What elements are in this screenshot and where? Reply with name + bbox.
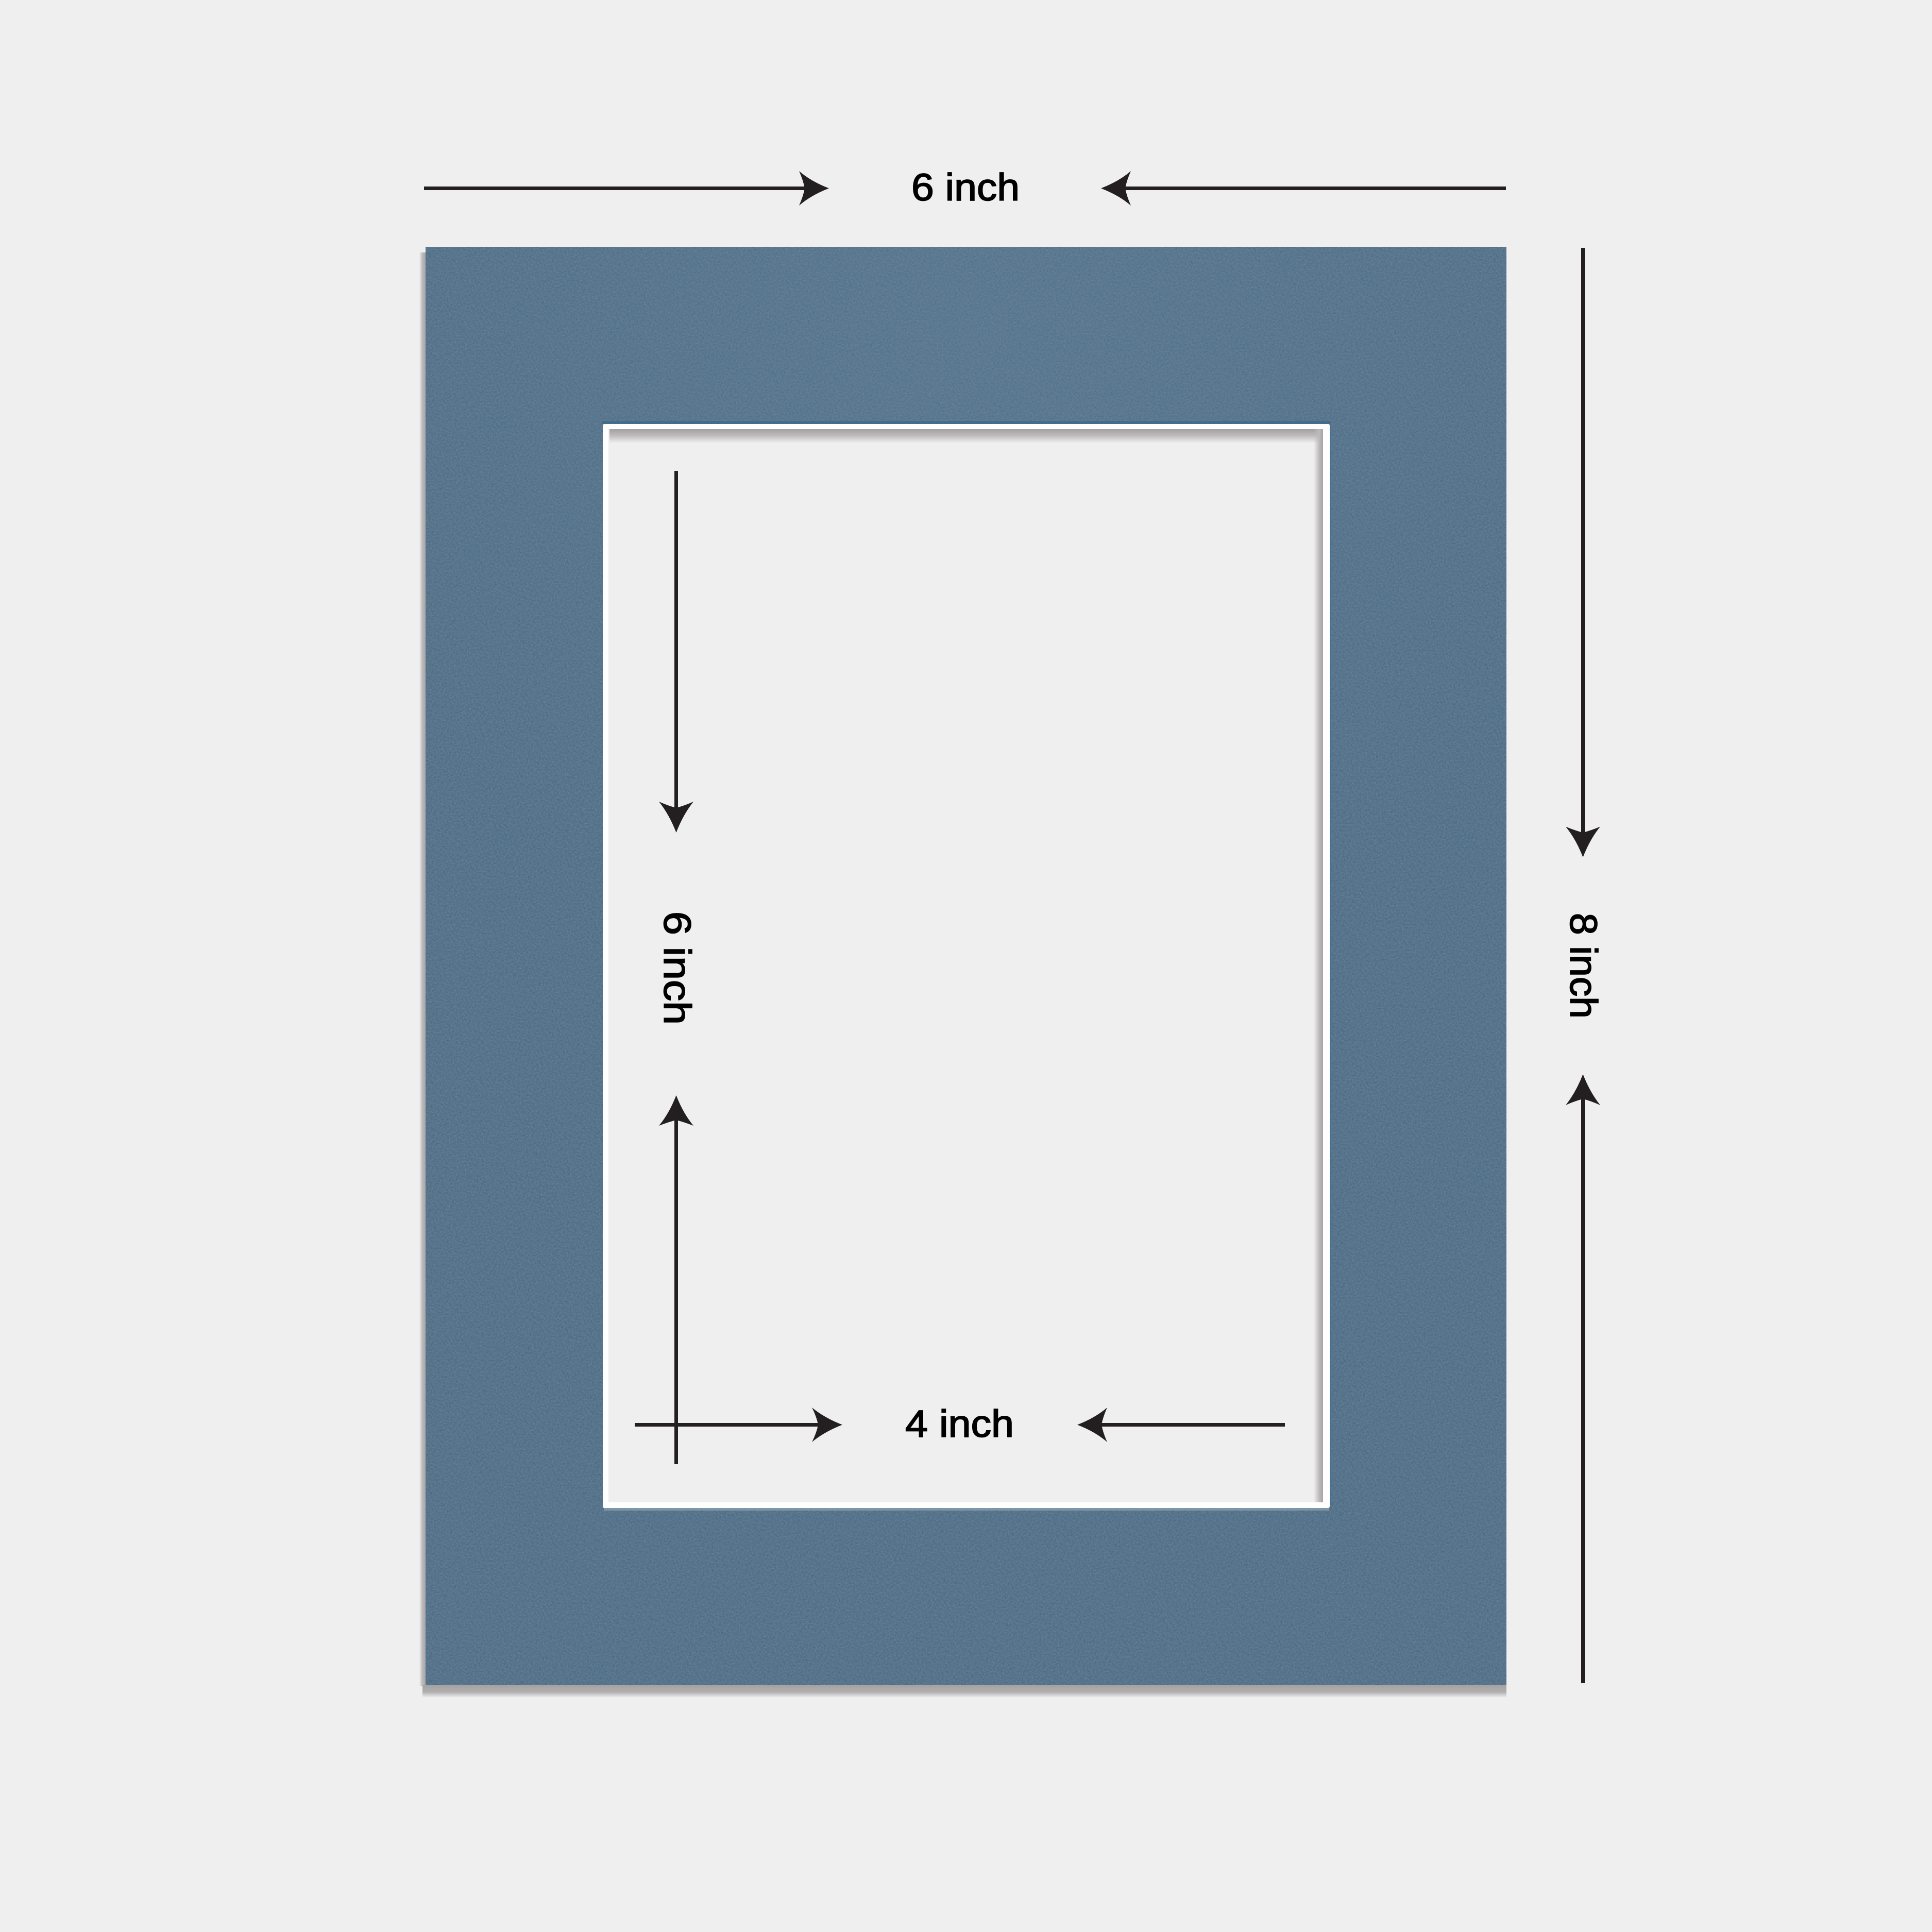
- arrow: window width, left: [635, 1408, 842, 1442]
- arrow: outer width, right: [1101, 171, 1506, 206]
- arrow: window width, right: [1077, 1408, 1285, 1442]
- window bevel edge: [602, 421, 1331, 1511]
- label: window height: 6 inch: [656, 911, 699, 1025]
- mat drop shadow: [419, 252, 1506, 1698]
- window opening: [608, 429, 1323, 1502]
- label: outer height: 8 inch: [1562, 913, 1605, 1019]
- label: outer width: 6 inch: [911, 166, 1020, 209]
- panel: blue mat board with window cut-out: [419, 247, 1506, 1698]
- arrow: window height, bottom: [659, 1095, 693, 1464]
- label: window width: 4 inch: [905, 1402, 1014, 1445]
- arrow: window height, top: [659, 471, 693, 833]
- arrow: outer height, bottom: [1566, 1074, 1600, 1683]
- arrow: outer width, left: [424, 171, 829, 206]
- mat surface: [426, 247, 1506, 1685]
- arrow: outer height, top: [1566, 248, 1600, 857]
